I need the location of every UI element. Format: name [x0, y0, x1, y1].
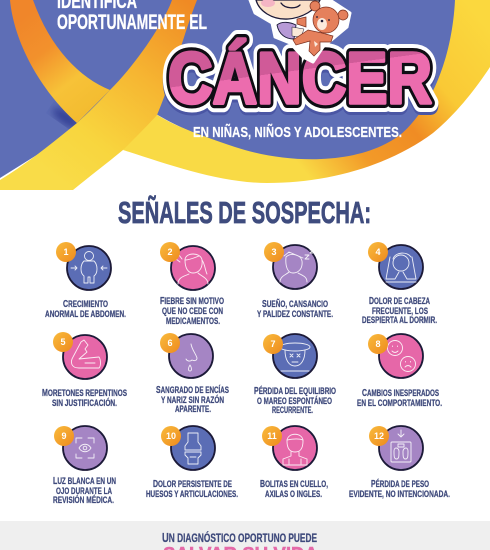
label 11: BOLITAS EN CUELLO, — [260, 478, 328, 490]
sign 8: behaviour — [357, 334, 442, 409]
label 2: QUE NO CEDE CON — [162, 306, 223, 317]
badge 5: 5 — [60, 337, 66, 347]
footer band — [0, 521, 490, 550]
label 10: DOLOR PERSISTENTE DE — [153, 478, 232, 490]
label 6 — [156, 384, 229, 415]
label 3: Y PALIDEZ CONSTANTE. — [257, 309, 333, 320]
subtitle: EN NIÑAS, NIÑOS Y ADOLESCENTES. — [193, 123, 402, 141]
badge 9: 9 — [61, 431, 67, 441]
icon: arm — [63, 335, 107, 379]
sign 11: lumps — [260, 426, 328, 500]
badge 12: 12 — [374, 431, 384, 441]
icon: bathroom scale with arrow — [379, 426, 423, 470]
label 1: CRECIMIENTO — [63, 298, 108, 310]
label 8 — [357, 387, 442, 409]
logo word: cáncer: CÁNCER — [168, 39, 432, 119]
label 6: Y NARIZ SIN RAZÓN — [161, 394, 224, 406]
label 10 — [146, 478, 238, 500]
label 11 — [260, 478, 328, 500]
header line: oportunamente el: OPORTUNAMENTE EL — [57, 11, 207, 34]
label 8: CAMBIOS INESPERADOS — [362, 387, 439, 399]
label 4: DOLOR DE CABEZA — [369, 295, 430, 307]
label 3 — [257, 298, 333, 320]
label 9 — [53, 475, 116, 506]
logo word: cáncer: CÁNCER — [168, 39, 432, 119]
label 9: LUZ BLANCA EN UN — [53, 475, 116, 487]
icon: sleepy person — [273, 245, 317, 289]
label 6: APARENTE. — [175, 404, 211, 415]
label 1 — [45, 298, 126, 320]
mascot: child with teddy bear — [250, 0, 350, 62]
logo word: cáncer: CÁNCER — [168, 42, 432, 122]
label 11: AXILAS O INGLES. — [265, 489, 322, 500]
header background: blue field — [0, 0, 458, 178]
footer line: diagnostic: UN DIAGNÓSTICO OPORTUNO PUEDE — [162, 530, 317, 545]
label 7: O MAREO ESPONTÁNEO — [257, 396, 332, 407]
sign 5: bruises — [42, 332, 127, 409]
ribbon shadow — [49, 104, 83, 132]
sign 10: bone pain — [146, 426, 238, 500]
label 3: SUEÑO, CANSANCIO — [262, 298, 328, 310]
ribbon: left strand — [10, 0, 110, 123]
label 6: SANGRADO DE ENCÍAS — [156, 384, 229, 396]
icon: person holding head — [379, 245, 423, 289]
sign 4: headache — [362, 242, 437, 326]
badge 3: 3 — [271, 247, 277, 257]
sign 9: white light — [53, 426, 116, 506]
sign 3: tiredness — [257, 242, 333, 320]
icon: eye scan — [63, 426, 107, 470]
badge 11: 11 — [267, 431, 277, 441]
badge 8: 8 — [375, 339, 381, 349]
label 7: RECURRENTE. — [272, 405, 313, 416]
label 12: EVIDENTE, NO INTENCIONADA. — [349, 489, 450, 500]
icon: dizzy head — [273, 334, 317, 378]
badge 1: 1 — [63, 247, 69, 257]
label 9: OJO DURANTE LA — [56, 486, 112, 497]
logo word: cáncer: CÁNCER — [168, 39, 432, 119]
label 5 — [42, 387, 127, 409]
icon: happy and sad faces — [379, 334, 423, 378]
sign 6: bleeding — [156, 333, 229, 415]
badge 4: 4 — [375, 247, 381, 257]
label 12: PÉRDIDA DE PESO — [371, 478, 429, 490]
label 7: PÉRDIDA DEL EQUILIBRIO — [254, 385, 336, 397]
badge 7: 7 — [270, 339, 276, 349]
label 9: REVISIÓN MÉDICA. — [53, 494, 114, 506]
badge 6: 6 — [167, 338, 173, 348]
label 5: SIN JUSTIFICACIÓN. — [52, 397, 117, 409]
label 1: ANORMAL DE ABDOMEN. — [45, 309, 126, 320]
label 4 — [362, 295, 437, 326]
label 12 — [349, 478, 450, 500]
icon: feverish person — [171, 246, 215, 290]
icon: body with arrows — [67, 246, 111, 290]
label 4: FRECUENTE, LOS — [372, 306, 428, 317]
icon: nose with drop — [169, 334, 213, 378]
label 10: HUESOS Y ARTICULACIONES. — [146, 489, 238, 500]
sign 1: abdomen — [45, 242, 126, 320]
label 7 — [254, 385, 336, 416]
ribbon: crossing strand — [0, 0, 197, 190]
icon: knee joint — [171, 426, 215, 470]
sign 2: fever — [160, 242, 224, 327]
sign 7: dizziness — [254, 334, 336, 416]
badge 2: 2 — [167, 247, 173, 257]
icon: boy bust — [273, 426, 317, 470]
label 2 — [160, 295, 224, 327]
ribbon: large loop — [123, 0, 490, 183]
label 2: MEDICAMENTOS. — [166, 316, 220, 327]
label 8: EN EL COMPORTAMIENTO. — [357, 398, 442, 409]
sign 12: weight loss — [349, 426, 450, 500]
badge 10: 10 — [166, 431, 176, 441]
label 2: FIEBRE SIN MOTIVO — [160, 295, 224, 307]
label 4: DESPIERTA AL DORMIR. — [362, 315, 437, 326]
label 5: MORETONES REPENTINOS — [42, 387, 127, 399]
